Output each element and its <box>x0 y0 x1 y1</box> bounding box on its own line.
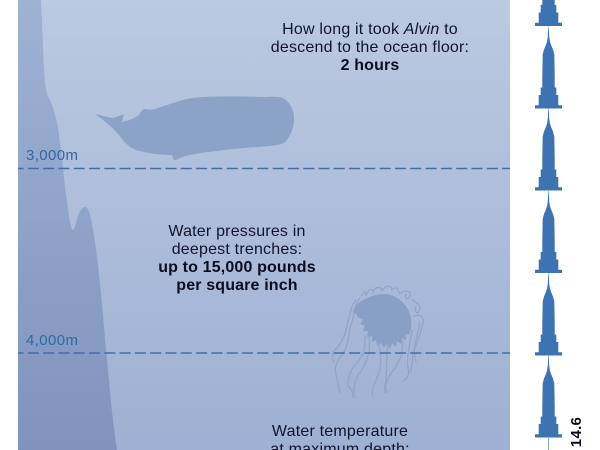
text: descent time: How long it took Alvin to <box>282 21 458 38</box>
jellyfish <box>333 286 423 398</box>
text: water pressure: up to 15,000 pounds <box>158 259 316 276</box>
text: water temperature: Water temperature <box>272 423 408 440</box>
text: water pressure <box>158 223 316 294</box>
seafloor ridge <box>18 0 117 450</box>
text: descent time: descend to the ocean floor: <box>271 39 469 56</box>
depth line 3,000m <box>18 168 510 170</box>
text: water temperature <box>270 423 410 450</box>
label 3,000m: 3,000m <box>26 147 78 164</box>
text: water pressure: deepest trenches: <box>172 241 302 258</box>
text: descent time <box>271 21 469 74</box>
text: water pressure: Water pressures in <box>168 223 306 240</box>
text: water pressure: per square inch <box>176 277 298 294</box>
value: 14.6 buildings: 14.6 <box>568 417 585 447</box>
jellyfish bell <box>353 294 411 349</box>
jellyfish tentacles <box>333 286 423 398</box>
label 4,000m: 4,000m <box>26 332 78 349</box>
depth line 4,000m <box>18 352 510 354</box>
empire state building stack <box>535 0 562 450</box>
whale silhouette <box>95 96 294 160</box>
text: descent time: 2 hours <box>341 57 399 74</box>
